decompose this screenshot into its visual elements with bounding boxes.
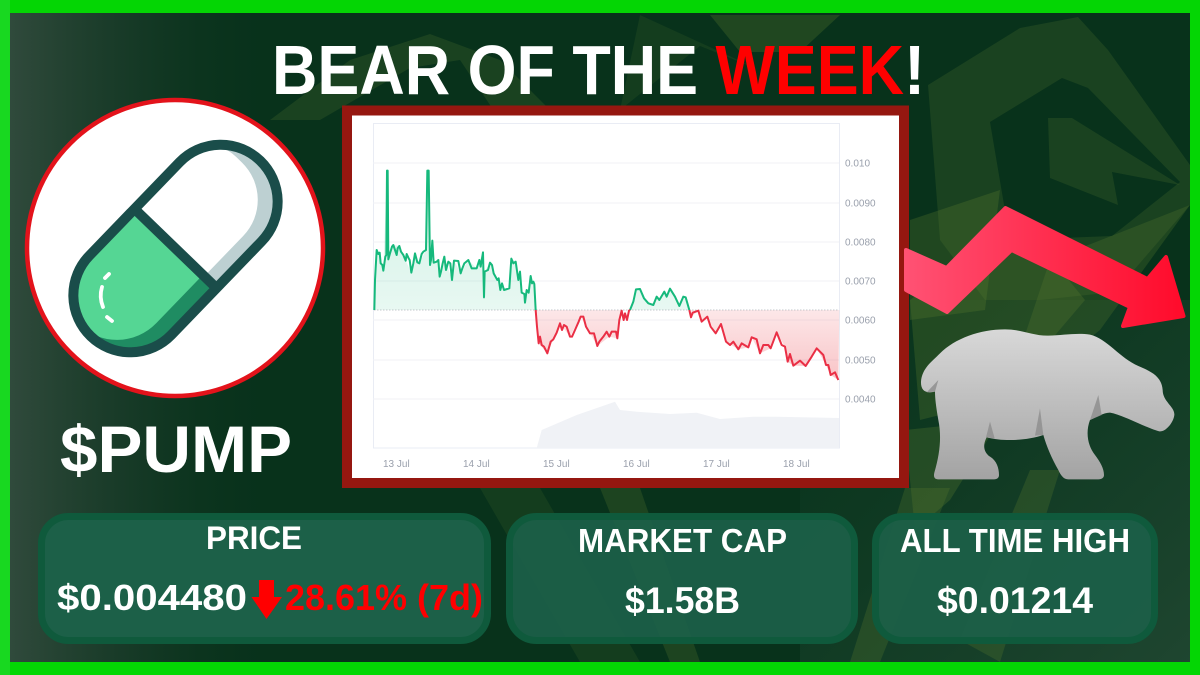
x axis labels: 13 Jul (383, 459, 410, 470)
x axis labels (383, 459, 810, 470)
volume area (537, 402, 839, 448)
icon: pill capsule (68, 140, 283, 358)
market cap value: $1.58B (625, 580, 740, 621)
y axis labels: 0.0060 (845, 316, 876, 326)
panel: all time high (876, 516, 1154, 640)
bear shading (927, 380, 1102, 438)
y axis labels: 0.0050 (845, 356, 876, 366)
icon: down arrow (252, 580, 282, 619)
chart gridlines (373, 124, 840, 448)
price card (42, 516, 488, 640)
panel: market cap (510, 516, 854, 640)
green area (374, 171, 689, 310)
arrow: falling trend (906, 208, 1184, 326)
chart frame (347, 110, 904, 483)
red price line (536, 310, 838, 380)
x axis labels: 14 Jul (463, 459, 490, 470)
y axis labels (845, 158, 876, 406)
panel: price chart (347, 110, 904, 483)
price line (374, 171, 839, 380)
market cap card (510, 516, 854, 640)
price change: 28.61% (7d) (285, 577, 483, 618)
price value: $0.004480 (57, 577, 247, 618)
y axis labels: 0.010 (845, 158, 870, 170)
token name: $PUMP (60, 412, 292, 486)
logo circle (27, 100, 323, 396)
all time high label: ALL TIME HIGH (900, 522, 1130, 559)
token logo (27, 100, 323, 396)
x axis labels: 15 Jul (543, 459, 570, 470)
baseline (374, 308, 839, 311)
price label: PRICE (206, 520, 302, 556)
y axis labels: 0.0070 (845, 276, 876, 288)
y axis labels: 0.0090 (845, 198, 876, 210)
market cap label: MARKET CAP (578, 522, 787, 559)
green price line (374, 171, 689, 310)
all time high card (876, 516, 1154, 640)
y axis labels: 0.0040 (845, 394, 876, 406)
icon: bear (921, 329, 1174, 479)
x axis labels: 18 Jul (783, 459, 810, 470)
y axis labels: 0.0080 (845, 238, 876, 248)
red area (536, 310, 839, 380)
x axis labels: 16 Jul (623, 459, 650, 470)
title: BEAR OF THE WEEK! (272, 31, 925, 109)
all time high value: $0.01214 (937, 580, 1093, 621)
x axis labels: 17 Jul (703, 459, 730, 470)
panel: price (42, 516, 488, 640)
